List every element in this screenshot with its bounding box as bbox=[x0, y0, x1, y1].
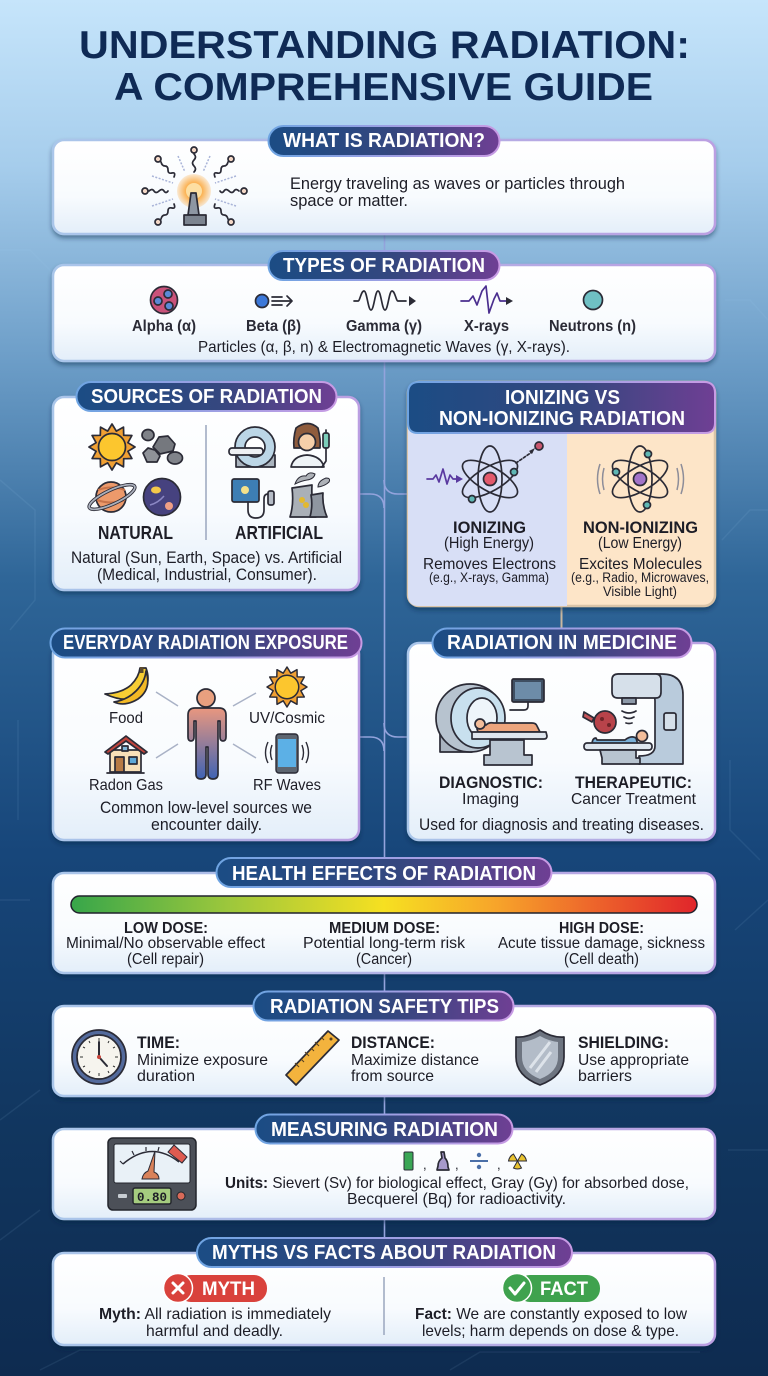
text: non-ionizing column: Visible Light) bbox=[603, 584, 677, 599]
title: UNDERSTANDING RADIATION: bbox=[79, 24, 690, 67]
icon: gamma wave bbox=[354, 291, 416, 310]
source labels: NATURAL bbox=[98, 523, 173, 543]
heading: what is radiation bbox=[268, 126, 500, 156]
title: A COMPREHENSIVE GUIDE bbox=[114, 66, 653, 109]
icons: unit symbols: , bbox=[497, 1157, 501, 1172]
type labels bbox=[132, 318, 636, 335]
icon: radiation meter: 0.80 bbox=[137, 1190, 167, 1205]
heading: radiation in medicine bbox=[432, 628, 692, 658]
text: myth statement: Myth: All radiation is immediately bbox=[99, 1306, 331, 1323]
text: sources caption: (Medical, Industrial, Consumer). bbox=[97, 566, 317, 584]
text: medium dose bbox=[303, 920, 465, 968]
panel: measuring radiation bbox=[53, 1114, 715, 1219]
text: myth statement: harmful and deadly. bbox=[146, 1323, 283, 1340]
text: high dose: HIGH DOSE: bbox=[559, 920, 644, 937]
heading: everyday radiation exposure bbox=[50, 628, 362, 658]
panel: ionizing vs non-ionizing bbox=[408, 382, 715, 606]
icon: alpha particle bbox=[150, 286, 178, 314]
chart: dose gradient bar bbox=[71, 896, 697, 913]
icon: ruler bbox=[286, 1031, 339, 1085]
text: time bbox=[137, 1034, 268, 1085]
text: time: duration bbox=[137, 1068, 195, 1085]
text: shielding: Use appropriate bbox=[578, 1052, 689, 1069]
text: non-ionizing column: NON-IONIZING bbox=[583, 518, 698, 537]
text: non-ionizing column: (Low Energy) bbox=[598, 535, 682, 552]
text: distance: DISTANCE: bbox=[351, 1034, 435, 1052]
badge: fact bbox=[502, 1274, 600, 1302]
text: ionizing column: IONIZING bbox=[453, 518, 526, 537]
text: ionizing column: (High Energy) bbox=[444, 535, 534, 552]
text: non-ionizing column bbox=[571, 518, 709, 599]
text: food: Food bbox=[109, 710, 143, 727]
source labels bbox=[98, 523, 323, 543]
central connector lines bbox=[359, 234, 562, 1253]
heading: sources of radiation: SOURCES OF RADIATION bbox=[91, 386, 322, 408]
text: medicine labels: DIAGNOSTIC: bbox=[439, 773, 543, 792]
heading: what is radiation: WHAT IS RADIATION? bbox=[283, 130, 485, 152]
title bbox=[79, 24, 690, 109]
icon: beta particle bbox=[256, 294, 292, 308]
icon: mri scanner bbox=[229, 427, 275, 467]
type labels: Alpha (α) bbox=[132, 318, 196, 335]
text: units: Units: Sievert (Sv) for biological effect, Gray (Gy) for absorbed dose, bbox=[225, 1175, 689, 1192]
text: shielding: barriers bbox=[578, 1068, 632, 1085]
text: low dose: (Cell repair) bbox=[127, 951, 204, 968]
icon: ct scanner bbox=[436, 679, 547, 765]
text: definition: Energy traveling as waves or particles through bbox=[290, 175, 625, 193]
text: units bbox=[225, 1175, 689, 1208]
text: sources caption: Natural (Sun, Earth, Space) vs. Artificial bbox=[71, 549, 342, 567]
icon: banana bbox=[105, 667, 148, 704]
column: ionizing background bbox=[408, 420, 567, 606]
text: time: Minimize exposure bbox=[137, 1052, 268, 1069]
icon: radiation source bbox=[142, 147, 247, 225]
text: medium dose: MEDIUM DOSE: bbox=[329, 920, 440, 937]
source labels: ARTIFICIAL bbox=[235, 523, 323, 543]
icon: phone bbox=[266, 734, 308, 773]
icon: x-ray wave bbox=[461, 286, 513, 313]
icon: neutron bbox=[584, 290, 602, 310]
panel: myths vs facts bbox=[53, 1238, 715, 1345]
panel: sources of radiation bbox=[53, 382, 359, 590]
text: everyday caption bbox=[100, 799, 312, 834]
text: medicine labels bbox=[439, 773, 697, 808]
icon: rocks bbox=[142, 430, 182, 464]
icon: ionizing atom bbox=[427, 442, 543, 512]
heading: radiation in medicine: RADIATION IN MEDICINE bbox=[447, 632, 677, 654]
heading: ionizing vs non-ionizing: NON-IONIZING RADIATION bbox=[439, 408, 685, 430]
text: ionizing column: Removes Electrons bbox=[423, 556, 556, 573]
panel: health effects of radiation bbox=[53, 858, 715, 973]
divider bbox=[383, 1277, 385, 1335]
icon: clock bbox=[72, 1030, 126, 1084]
text: ionizing column: (e.g., X-rays, Gamma) bbox=[429, 570, 549, 585]
text: myth statement bbox=[99, 1306, 331, 1340]
text: distance: from source bbox=[351, 1068, 434, 1085]
heading: myths vs facts: MYTHS VS FACTS ABOUT RADIATION bbox=[212, 1242, 556, 1264]
text: units: Becquerel (Bq) for radioactivity. bbox=[347, 1191, 566, 1208]
icon: non-ionizing atom bbox=[598, 446, 684, 512]
text: time: TIME: bbox=[137, 1034, 180, 1052]
text: non-ionizing column: (e.g., Radio, Microwaves, bbox=[571, 570, 709, 585]
type labels: Gamma (γ) bbox=[346, 318, 422, 335]
heading: health effects: HEALTH EFFECTS OF RADIATION bbox=[232, 863, 536, 885]
badge: myth bbox=[164, 1274, 267, 1302]
icons: unit symbols: , bbox=[455, 1157, 459, 1172]
icon: radiation meter bbox=[108, 1138, 196, 1210]
type labels: X-rays bbox=[464, 318, 509, 335]
text: shielding bbox=[578, 1034, 689, 1085]
text: everyday caption: encounter daily. bbox=[151, 816, 262, 834]
text: medium dose: (Cancer) bbox=[356, 951, 412, 968]
text: medicine labels: Cancer Treatment bbox=[571, 791, 697, 808]
icon: doctor bbox=[291, 424, 329, 467]
icons: unit symbols bbox=[404, 1152, 526, 1172]
text: low dose bbox=[66, 920, 266, 968]
icon: power plant bbox=[290, 473, 330, 517]
heading: safety tips: RADIATION SAFETY TIPS bbox=[270, 996, 499, 1018]
panel: what is radiation bbox=[53, 126, 715, 234]
icon: uv sun bbox=[267, 667, 307, 707]
text: medicine labels: THERAPEUTIC: bbox=[575, 773, 692, 792]
type labels: Neutrons (n) bbox=[549, 318, 636, 335]
text: ionizing column bbox=[423, 518, 556, 585]
text: definition bbox=[290, 175, 625, 210]
type labels: Beta (β) bbox=[246, 318, 301, 335]
text: high dose: Acute tissue damage, sickness bbox=[498, 935, 705, 952]
icon: radiotherapy machine bbox=[583, 674, 683, 764]
icons: unit symbols: , bbox=[423, 1157, 427, 1172]
connector lines to person bbox=[156, 692, 256, 758]
text: distance bbox=[351, 1034, 479, 1085]
text: high dose bbox=[498, 920, 705, 968]
panel: types of radiation bbox=[53, 251, 715, 361]
panel: everyday radiation exposure bbox=[50, 628, 362, 840]
badge: fact: FACT bbox=[540, 1279, 588, 1300]
panel: radiation safety tips bbox=[53, 992, 715, 1096]
text: sources caption bbox=[71, 549, 342, 584]
heading: measuring radiation: MEASURING RADIATION bbox=[271, 1119, 498, 1141]
text: high dose: (Cell death) bbox=[564, 951, 639, 968]
divider bbox=[205, 425, 207, 540]
text: distance: Maximize distance bbox=[351, 1052, 479, 1069]
text: fact statement: Fact: We are constantly exposed to low bbox=[415, 1306, 687, 1323]
text: shielding: SHIELDING: bbox=[578, 1034, 669, 1052]
text: types caption: Particles (α, β, n) & Electromagnetic Waves (γ, X-rays). bbox=[198, 339, 570, 356]
heading: ionizing vs non-ionizing: IONIZING VS bbox=[505, 387, 620, 409]
icon: galaxy planet bbox=[144, 478, 180, 516]
icon: ultrasound monitor bbox=[232, 479, 274, 518]
text: low dose: Minimal/No observable effect bbox=[66, 935, 266, 952]
text: everyday caption: Common low-level sources we bbox=[100, 799, 312, 817]
text: radon gas: Radon Gas bbox=[89, 777, 163, 794]
icon: house bbox=[105, 736, 147, 773]
icon: person bbox=[188, 689, 226, 779]
text: rf waves: RF Waves bbox=[253, 777, 321, 794]
panel: radiation in medicine bbox=[408, 628, 715, 840]
text: medium dose: Potential long-term risk bbox=[303, 935, 465, 952]
text: medicine caption: Used for diagnosis and treating diseases. bbox=[419, 816, 704, 834]
text: non-ionizing column: Excites Molecules bbox=[579, 556, 702, 573]
icon: sun bbox=[89, 424, 135, 470]
text: fact statement bbox=[415, 1306, 687, 1340]
text: uv/cosmic: UV/Cosmic bbox=[249, 710, 325, 727]
text: fact statement: levels; harm depends on dose & type. bbox=[422, 1323, 679, 1340]
heading: ionizing vs non-ionizing bbox=[408, 382, 715, 433]
badge: myth: MYTH bbox=[202, 1279, 255, 1300]
icon: saturn bbox=[86, 480, 138, 514]
heading: types of radiation: TYPES OF RADIATION bbox=[283, 255, 485, 277]
text: definition: space or matter. bbox=[290, 192, 408, 210]
heading: everyday radiation exposure: EVERYDAY RADIATION EXPOSURE bbox=[63, 632, 348, 654]
icon: shield bbox=[516, 1030, 564, 1085]
text: low dose: LOW DOSE: bbox=[124, 920, 208, 937]
text: medicine labels: Imaging bbox=[462, 791, 519, 808]
